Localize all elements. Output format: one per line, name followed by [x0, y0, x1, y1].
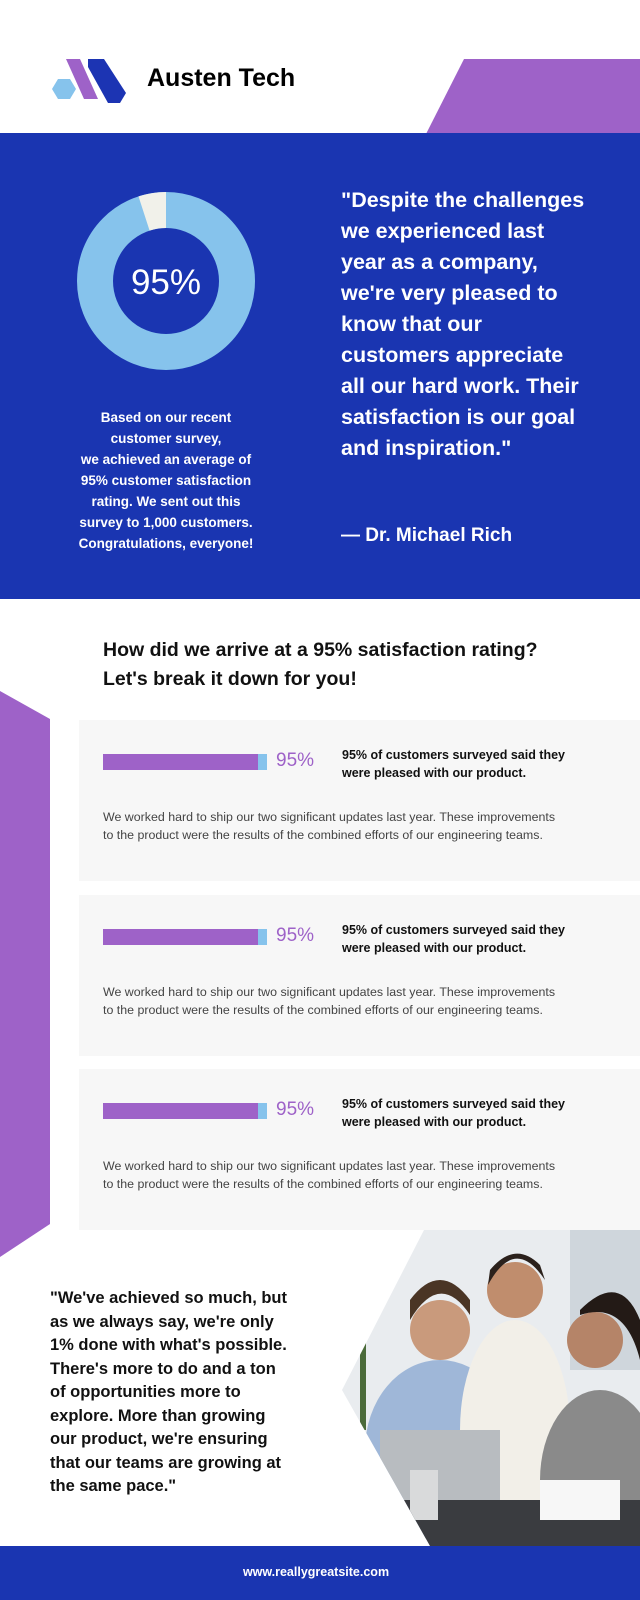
bottom quote: as we always say, we're only [50, 1312, 274, 1330]
card 1: We worked hard to ship our two significant updates last year. These improvements [103, 810, 555, 824]
logo [52, 59, 126, 103]
bottom quote: the same pace." [50, 1477, 176, 1495]
quote: customers appreciate [341, 343, 563, 367]
bottom quote: our product, we're ensuring [50, 1430, 268, 1448]
panel: blue hero [0, 133, 640, 599]
card 2 [79, 895, 640, 1056]
survey text: customer survey, [111, 431, 221, 446]
quote: "Despite the challenges [341, 188, 584, 212]
card 3: were pleased with our product. [342, 1115, 526, 1129]
bar 2 [103, 929, 267, 945]
survey text: Congratulations, everyone! [79, 536, 253, 551]
bottom quote [50, 1289, 287, 1495]
website url: www.reallygreatsite.com [243, 1565, 389, 1579]
quote: we experienced last [341, 219, 544, 243]
survey text: Based on our recent [101, 410, 231, 425]
quote: year as a company, [341, 250, 538, 274]
survey text [79, 410, 253, 551]
card 3: We worked hard to ship our two significant updates last year. These improvements [103, 1159, 555, 1173]
bottom quote: that our teams are growing at [50, 1454, 281, 1472]
bottom quote: of opportunities more to [50, 1383, 241, 1401]
card 1: 95% of customers surveyed said they [342, 748, 565, 762]
heading: How did we arrive at a 95% satisfaction rating? [103, 639, 538, 661]
survey text: 95% customer satisfaction [81, 473, 251, 488]
footer [0, 1546, 640, 1600]
card 2: We worked hard to ship our two significant updates last year. These improvements [103, 985, 555, 999]
quote: we're very pleased to [341, 281, 558, 305]
survey text: rating. We sent out this [91, 494, 240, 509]
card 2: 95% of customers surveyed said they [342, 923, 565, 937]
photo: team at laptop [342, 1230, 640, 1546]
quote [340, 188, 584, 460]
card 1: 95% [276, 750, 314, 771]
quote: satisfaction is our goal [341, 405, 575, 429]
quote: and inspiration." [341, 436, 511, 460]
donut chart: 95% [131, 263, 201, 302]
card 3: to the product were the results of the combined efforts of our engineering teams. [103, 1176, 543, 1190]
bottom quote: There's more to do and a ton [50, 1360, 276, 1378]
donut chart [77, 192, 255, 370]
survey text: survey to 1,000 customers. [79, 515, 253, 530]
heading [103, 639, 538, 690]
attribution: — Dr. Michael Rich [341, 525, 512, 546]
bar 1 [103, 754, 267, 770]
card 3 [79, 1069, 640, 1230]
quote: know that our [341, 312, 482, 336]
bottom quote: "We've achieved so much, but [50, 1289, 287, 1307]
card 2: were pleased with our product. [342, 941, 526, 955]
quote: all our hard work. Their [341, 374, 579, 398]
survey text: we achieved an average of [81, 452, 251, 467]
card 1 [79, 720, 640, 881]
card 2: to the product were the results of the combined efforts of our engineering teams. [103, 1002, 543, 1016]
card 1: to the product were the results of the combined efforts of our engineering teams. [103, 828, 543, 842]
company name: Austen Tech [147, 64, 295, 92]
bottom quote: 1% done with what's possible. [50, 1336, 287, 1354]
purple side shape [0, 691, 50, 1257]
card 3: 95% [276, 1099, 314, 1120]
bottom quote: explore. More than growing [50, 1406, 265, 1424]
card 2: 95% [276, 925, 314, 946]
heading: Let's break it down for you! [103, 668, 357, 690]
card 1: were pleased with our product. [342, 766, 526, 780]
purple header shape [426, 59, 640, 133]
card 3: 95% of customers surveyed said they [342, 1097, 565, 1111]
bar 3 [103, 1103, 267, 1119]
